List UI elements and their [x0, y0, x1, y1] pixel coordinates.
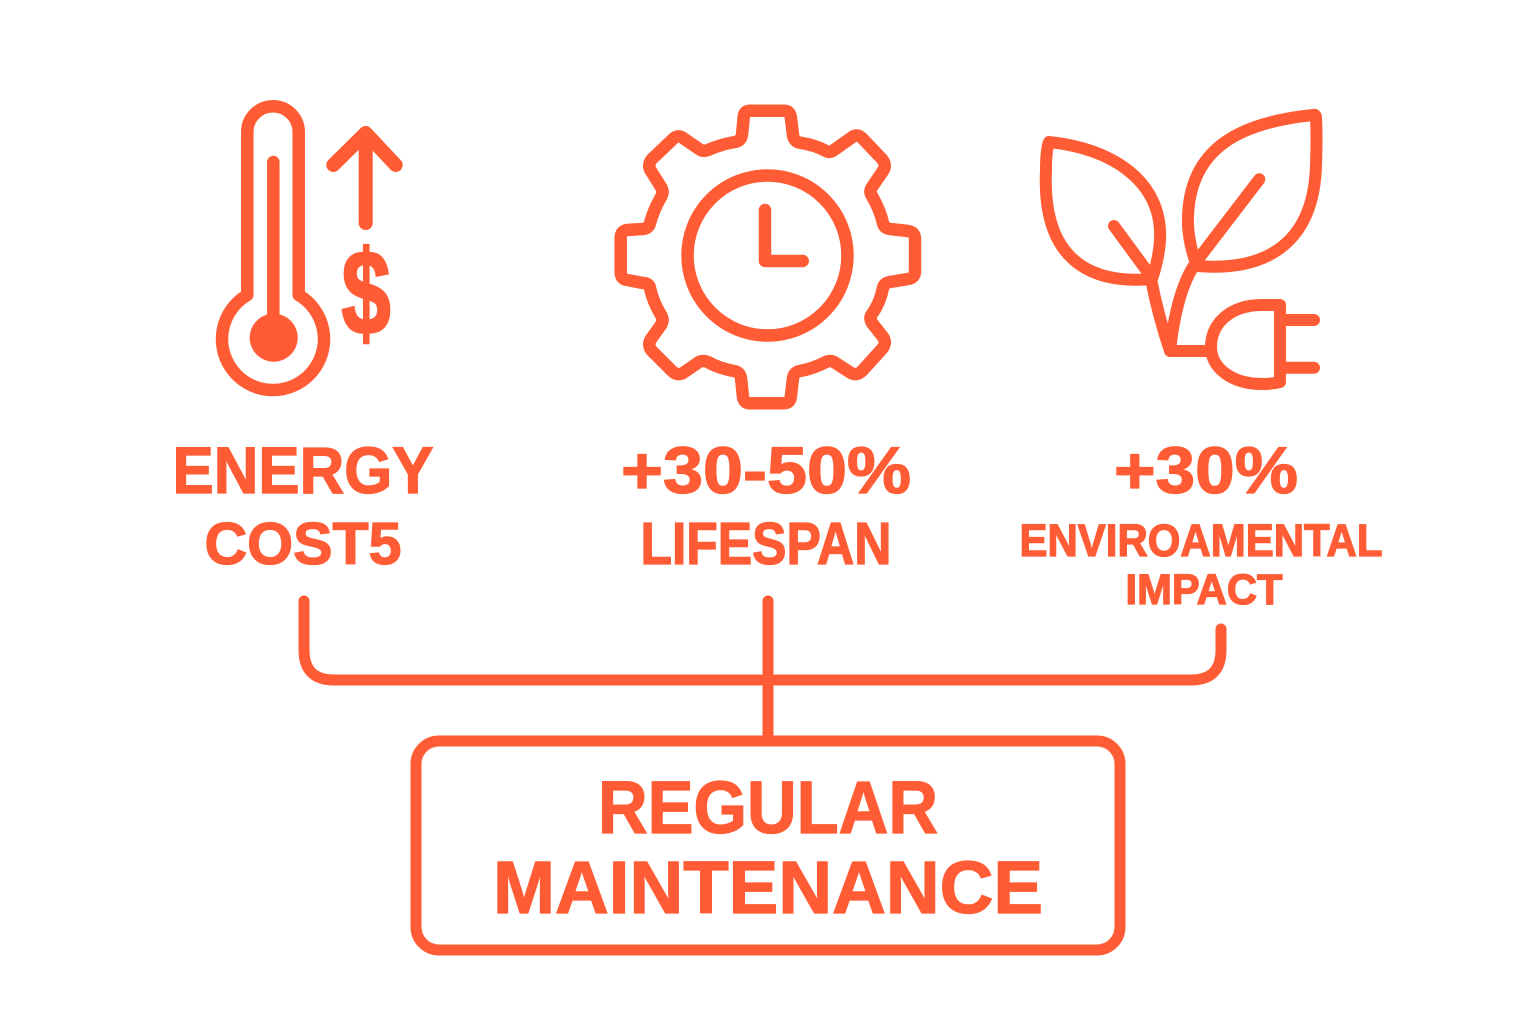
icon: gear with clock	[621, 111, 915, 403]
heading: energy costs: ENERGY	[172, 433, 434, 507]
heading: environmental impact: ENVIROAMENTAL	[1020, 515, 1382, 566]
icon: thermometer with rising cost: $	[341, 227, 391, 360]
heading: energy costs: COST5	[204, 511, 402, 577]
heading: environmental impact	[1020, 433, 1382, 614]
icon: thermometer with rising cost	[222, 106, 396, 390]
heading: lifespan: +30-50%	[621, 433, 911, 507]
heading: lifespan: LIFESPAN	[640, 511, 892, 577]
connector lines	[304, 601, 1221, 738]
icon: leaves with plug	[1046, 115, 1316, 384]
heading: environmental impact: IMPACT	[1126, 566, 1282, 614]
heading: energy costs	[172, 433, 434, 577]
box: regular maintenance: MAINTENANCE	[493, 846, 1043, 929]
heading: lifespan	[621, 433, 911, 577]
box: regular maintenance: REGULAR	[598, 766, 938, 849]
box: regular maintenance	[416, 741, 1120, 950]
heading: environmental impact: +30%	[1114, 433, 1298, 507]
